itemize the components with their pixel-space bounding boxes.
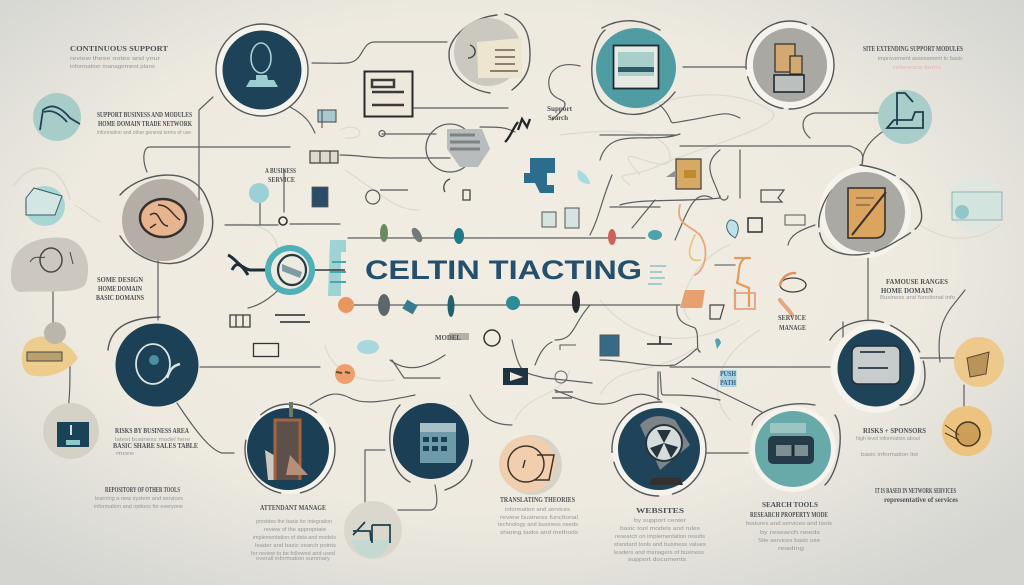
node: dark ring xyxy=(108,317,198,406)
text: teal radio caption: SEARCH TOOLS xyxy=(762,501,818,509)
small pins on top rail xyxy=(380,224,662,245)
text: tower caption: leader and basic search points xyxy=(255,543,336,549)
text: upper left: HOME DOMAIN TRADE NETWORK xyxy=(98,120,192,128)
text: lower left: more xyxy=(116,451,134,457)
node: dark calendar xyxy=(390,403,472,490)
text: tower caption: overall information summary xyxy=(256,556,330,562)
title: CELTIN TIACTING xyxy=(365,255,642,285)
node: beige brain xyxy=(120,175,213,264)
text: right mid: Business and functional info xyxy=(880,295,955,301)
text: top left xyxy=(70,45,168,70)
text: small center labels xyxy=(265,105,806,387)
text: tower caption: review of the appropriate xyxy=(264,527,326,533)
text: small center labels: Support xyxy=(547,105,573,113)
text: lower left: RISKS BY BUSINESS AREA xyxy=(115,427,189,435)
text: upper left: SUPPORT BUSINESS AND MODULES xyxy=(97,111,192,119)
lower center icons xyxy=(230,305,736,398)
text: fan caption: by support center xyxy=(634,518,686,524)
text: top left: information management plans xyxy=(70,64,155,70)
text: fan caption: WEBSITES xyxy=(636,507,684,515)
text: top right: reference items xyxy=(893,65,941,71)
text: peach caption: review business functional xyxy=(500,515,578,521)
small icon: yellow box xyxy=(954,337,1004,387)
connector lines xyxy=(53,42,965,510)
text: fan caption: support documents xyxy=(628,557,687,563)
text: top right: SITE EXTENDING SUPPORT MODULES xyxy=(863,45,963,53)
text: top right: improvement assessment to basic xyxy=(878,56,963,62)
small icon: teal machine xyxy=(878,90,932,144)
node: dark device xyxy=(830,320,925,413)
small icon: gray blob face xyxy=(11,237,88,292)
text: lower left: BASIC SHARE SALES TABLE xyxy=(113,442,198,450)
text: tower caption: implementation of data and models xyxy=(253,535,336,541)
text: bottom left: REPOSITORY OF OTHER TOOLS xyxy=(105,486,180,494)
text: top right xyxy=(863,45,963,71)
text: small center labels: PATH xyxy=(720,379,736,387)
text: lower left: latest business model here xyxy=(115,437,190,443)
gold box icon xyxy=(666,159,701,189)
text: peach caption: technology and business needs xyxy=(498,522,578,528)
text: fan caption: research on implementation results xyxy=(615,534,705,540)
small icon: yellow box with gray bubble xyxy=(22,322,78,376)
text: bottom left xyxy=(94,486,183,510)
text: small center labels: Search xyxy=(548,114,568,122)
text: device caption: high level information about xyxy=(856,436,921,442)
node: gray files xyxy=(746,21,834,109)
node: dark fan xyxy=(612,402,706,496)
text: upper left: information and other general terms of use xyxy=(97,130,191,136)
text: fan caption: basic tool models and rules xyxy=(620,526,700,532)
text: tower caption: provides the basis for integration xyxy=(256,519,332,525)
node: dark tower xyxy=(245,402,335,494)
text: tower caption: ATTENDANT MANAGE xyxy=(260,504,326,512)
text: fan caption: leaders and managers of business xyxy=(614,550,704,556)
node: gray paper pencil xyxy=(819,165,922,258)
text: tower caption xyxy=(251,504,336,562)
small icon: pale tablet xyxy=(949,177,1005,233)
small icon: teal wave xyxy=(33,93,81,141)
blue printer icon xyxy=(524,158,555,193)
small icon: teal chair xyxy=(344,501,402,559)
node: dark globe icon xyxy=(216,24,308,116)
text: tower caption: for review to be followed and used xyxy=(251,551,335,557)
node: teal radio xyxy=(750,404,840,492)
text: teal radio caption: by research needs xyxy=(760,530,821,536)
small icon: teal tablet xyxy=(13,168,70,226)
small teal drop xyxy=(542,170,805,238)
text: left mid: SOME DESIGN xyxy=(97,276,143,284)
text: right mid: HOME DOMAIN xyxy=(881,287,933,295)
text: small center labels: SERVICE xyxy=(778,314,806,322)
text: bottom right xyxy=(875,487,958,504)
text: small center labels: MANAGE xyxy=(779,324,806,332)
text: small center labels: PUSH xyxy=(720,370,736,378)
text: left mid xyxy=(96,276,144,302)
text: teal radio caption: Site services basic use xyxy=(758,538,820,544)
text: right mid: FAMOUSE RANGES xyxy=(886,278,948,286)
text: fan caption xyxy=(614,507,706,563)
node: paper document xyxy=(449,14,530,93)
pale connector web xyxy=(15,95,1000,420)
text: top left: review these notes and your xyxy=(70,56,160,62)
text: bottom left: learning a new system and services xyxy=(95,496,183,502)
teal ruled tab beside title xyxy=(315,240,346,296)
text: small center labels: A BUSINESS xyxy=(265,167,296,175)
text: peach caption xyxy=(498,496,579,536)
text: peach caption: information and services xyxy=(505,507,570,513)
text: bottom right: representative of services xyxy=(884,496,958,504)
center ring icon xyxy=(228,245,315,295)
text: small center labels: SERVICE xyxy=(268,176,295,184)
text: teal radio caption: RESEARCH PROPERTY MODE xyxy=(750,511,828,519)
text: lower left xyxy=(113,427,198,457)
text: device caption: RISKS + SPONSORS xyxy=(863,427,926,435)
small icon: gray display xyxy=(43,403,99,459)
text: teal radio caption: features and services and tools xyxy=(746,521,832,527)
node: teal monitor xyxy=(592,21,676,114)
small icon: peach sketch xyxy=(499,435,562,495)
small icon: yellow bag xyxy=(942,406,992,456)
text: bottom right: IT IS BASED IN NETWORK SERVICES xyxy=(875,487,956,495)
text: upper left xyxy=(97,111,192,136)
text: peach caption: TRANSLATING THEORIES xyxy=(500,496,575,504)
text: small center labels: MODEL xyxy=(435,334,461,342)
text: teal radio caption: reading xyxy=(778,546,804,552)
text: device caption: basic information list xyxy=(861,452,919,458)
small pins on lower rail xyxy=(338,291,580,317)
text: fan caption: standard tools and business values xyxy=(614,542,706,548)
text: teal radio caption xyxy=(746,501,832,552)
text: device caption xyxy=(856,427,926,458)
text: peach caption: sharing tasks and methods xyxy=(500,530,579,536)
text: left mid: BASIC DOMAINS xyxy=(96,294,144,302)
orange figures xyxy=(679,205,806,315)
text: right mid xyxy=(880,278,955,301)
machine icons center top xyxy=(249,72,530,225)
text: bottom left: information and options for everyone xyxy=(94,504,183,510)
text: left mid: HOME DOMAIN xyxy=(98,285,142,293)
text: top left: CONTINUOUS SUPPORT xyxy=(70,45,168,53)
